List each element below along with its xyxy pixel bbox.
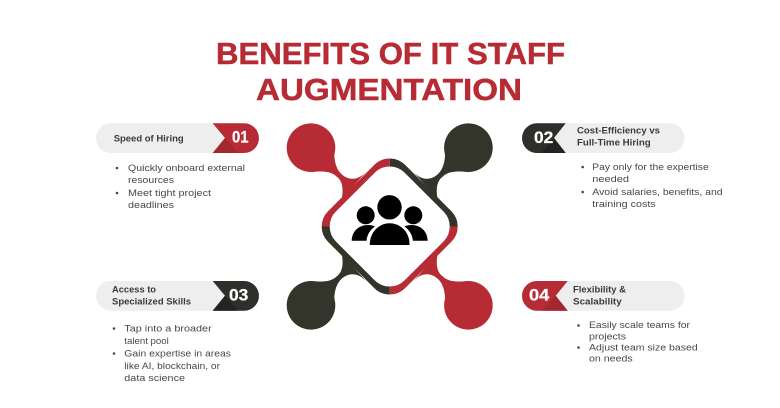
pill header 02: Cost-Efficiency vs xyxy=(577,125,660,136)
panel: 03 specialized skills xyxy=(96,281,259,384)
bullet list 02 xyxy=(581,162,723,210)
central hub diagram xyxy=(287,123,493,330)
panel: 01 speed of hiring xyxy=(96,123,259,211)
bullet list 04 xyxy=(577,320,698,364)
bullet list 04: Easily scale teams for xyxy=(589,320,691,331)
node: top-left red circle with connector xyxy=(287,123,366,199)
node: top-right dark circle with connector xyxy=(414,123,493,199)
bullet list 01: Quickly onboard external xyxy=(128,163,245,174)
panel: 04 flexibility xyxy=(522,281,698,364)
diamond ring xyxy=(322,158,458,294)
pill header 03 xyxy=(96,281,259,311)
bullet list 03 xyxy=(113,324,231,384)
bullet list 04: Adjust team size based xyxy=(589,342,698,354)
pill header 02: Full-Time Hiring xyxy=(577,138,651,148)
title: AUGMENTATION xyxy=(256,72,522,107)
icon: group of people xyxy=(352,195,428,245)
bullet list 03: talent pool xyxy=(124,336,169,347)
title: BENEFITS OF IT STAFF xyxy=(216,36,565,71)
bullet list 04: projects xyxy=(589,332,626,342)
pill header 04: Scalability xyxy=(573,296,622,307)
bullet list 01: deadlines xyxy=(128,200,174,211)
pill header 02: 02 xyxy=(534,129,553,147)
pill header 03: Access to xyxy=(112,284,156,295)
bullet list 03: like AI, blockchain, or xyxy=(124,361,221,372)
bullet list 02: training costs xyxy=(592,199,656,210)
node: bottom-left dark circle with connector xyxy=(287,254,366,330)
bullet list 01: resources xyxy=(128,175,174,186)
node: bottom-right red circle with connector xyxy=(414,254,493,330)
bullet list 02: needed xyxy=(592,174,629,185)
pill header 04: 04 xyxy=(529,287,550,305)
pill header 01: 01 xyxy=(232,128,248,146)
pill header 01: Speed of Hiring xyxy=(114,134,184,144)
panel: 02 cost-efficiency xyxy=(522,123,723,210)
pill header 01 xyxy=(96,123,259,153)
bullet list 04: on needs xyxy=(589,354,633,364)
bullet list 03: data science xyxy=(124,373,185,384)
bullet list 03: Gain expertise in areas xyxy=(124,348,231,360)
title xyxy=(216,36,565,107)
bullet list 02: Pay only for the expertise xyxy=(592,162,709,173)
pill header 04 xyxy=(522,281,684,311)
bullet list 02: Avoid salaries, benefits, and xyxy=(592,187,723,198)
pill header 03: 03 xyxy=(229,287,248,305)
bullet list 01 xyxy=(116,163,245,211)
bullet list 01: Meet tight project xyxy=(128,188,211,199)
pill header 04: Flexibility & xyxy=(573,284,626,295)
pill header 03: Specialized Skills xyxy=(112,296,191,307)
bullet list 03: Tap into a broader xyxy=(124,324,213,334)
pill header 02 xyxy=(522,123,684,153)
